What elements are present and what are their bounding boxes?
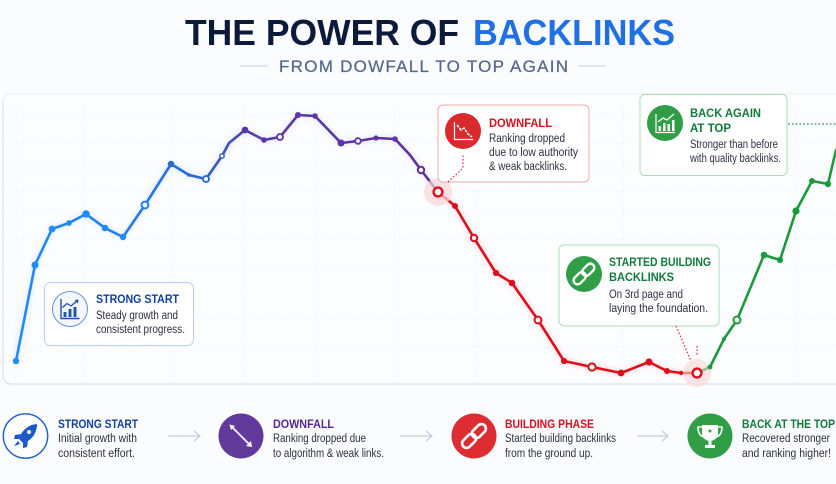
segment: green line	[697, 150, 836, 373]
panel: chart area	[3, 94, 836, 384]
step: strong start: Initial growth with	[58, 433, 137, 445]
segment: blue to purple line	[16, 115, 438, 361]
callout: back again at top	[640, 94, 787, 176]
step: downfall: to algorithm & weak links.	[273, 448, 384, 460]
marker: turning point	[683, 359, 711, 387]
step: strong start	[3, 414, 139, 460]
icon: rocket	[3, 414, 48, 458]
callout: strong start: STRONG START	[96, 292, 180, 306]
callout: downfall: & weak backlinks.	[489, 161, 567, 173]
markers: purple	[242, 112, 424, 173]
callout: downfall: DOWNFALL	[489, 116, 552, 130]
step: strong start: consistent effort.	[58, 448, 135, 460]
step: downfall: DOWNFALL	[273, 417, 334, 431]
callout: back again at top: with quality backlinks.	[689, 153, 781, 165]
callout: strong start	[44, 282, 194, 346]
callout: back again at top: AT TOP	[690, 121, 731, 135]
callout: strong start: Steady growth and	[96, 310, 178, 322]
step: building phase: BUILDING PHASE	[505, 417, 594, 431]
step: building phase: from the ground up.	[505, 448, 593, 460]
step: downfall	[218, 414, 384, 460]
icon: chain link	[566, 256, 602, 292]
icon: down arrow	[218, 414, 264, 458]
step: back at the top	[688, 414, 835, 460]
connector: downfall callout to point	[448, 155, 463, 182]
callout: started building backlinks: On 3rd page and	[609, 289, 683, 301]
icon: falling chart	[445, 113, 481, 149]
callout: strong start: consistent progress.	[96, 324, 185, 336]
step: strong start: STRONG START	[58, 417, 139, 431]
step: building phase	[452, 414, 616, 460]
markers: blue	[13, 154, 224, 364]
callout: downfall: due to low authority	[489, 147, 578, 159]
title: BACKLINKS	[473, 12, 675, 53]
connector: building callout to point	[676, 326, 697, 361]
connector: back at top callout to line	[788, 123, 836, 125]
arrow: step 3 to 4	[637, 431, 668, 441]
step: building phase: Started building backlinks	[505, 433, 616, 445]
subtitle: FROM DOWFALL TO TOP AGAIN	[279, 57, 568, 76]
markers: green	[708, 178, 831, 369]
callout: downfall	[438, 105, 589, 182]
icon: growth chart	[52, 292, 88, 326]
callout: downfall: Ranking dropped	[489, 133, 565, 145]
marker: downfall point	[424, 178, 452, 206]
callout: started building backlinks: laying the foundation.	[609, 303, 708, 315]
callout: started building backlinks: BACKLINKS	[609, 270, 674, 284]
markers: red	[452, 203, 683, 376]
line chart: ranking trend	[13, 112, 836, 387]
step: downfall: Ranking dropped due	[273, 433, 366, 445]
icon: chain link	[452, 414, 496, 458]
icon: trophy	[688, 414, 732, 458]
arrow: step 2 to 3	[400, 431, 432, 441]
callout: started building backlinks: STARTED BUILDING	[609, 255, 711, 269]
arrow: step 1 to 2	[168, 431, 200, 441]
callout: back again at top: BACK AGAIN	[690, 106, 761, 120]
segment: red line	[438, 192, 697, 373]
title: THE POWER OF	[185, 12, 459, 53]
callout: started building backlinks	[559, 245, 719, 326]
icon: rising chart	[647, 105, 683, 141]
title	[185, 12, 675, 53]
callout: back again at top: Stronger than before	[690, 139, 778, 151]
